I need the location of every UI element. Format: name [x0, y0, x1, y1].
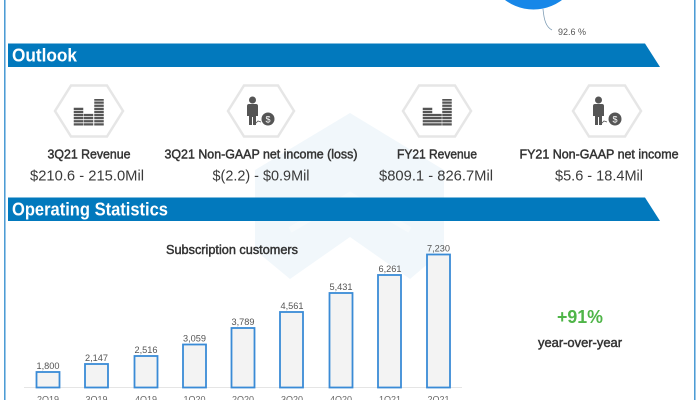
callout: +91% year-over-year: year-over-year	[538, 336, 622, 350]
pie chart fragment: 92.6 %	[558, 27, 587, 38]
bar chart: Subscription customers: 2,516	[134, 345, 158, 355]
panel: 3Q21 Revenue	[30, 86, 144, 184]
panel: FY21 Non-GAAP net income: FY21 Non-GAAP net income	[520, 148, 679, 162]
bar chart: Subscription customers: 1,800	[36, 361, 60, 371]
bar chart: Subscription customers: 4,561	[280, 301, 304, 311]
panel: 3Q21 Non-GAAP net income (loss): 3Q21 Non-GAAP net income (loss)	[164, 148, 358, 162]
heading: Outlook	[8, 44, 660, 67]
panel: FY21 Non-GAAP net income: $5.6 - 18.4Mil	[555, 168, 643, 184]
icon: person with dollar coin	[228, 86, 294, 136]
icon: coins	[403, 86, 471, 136]
chart title: Subscription customers	[166, 243, 298, 257]
panel: FY21 Non-GAAP net income	[520, 86, 679, 184]
panel: 3Q21 Non-GAAP net income (loss)	[164, 86, 358, 184]
icon: person with dollar coin: $	[612, 114, 618, 124]
bar chart: Subscription customers	[24, 243, 462, 400]
watermark logo	[255, 113, 444, 279]
panel: 3Q21 Non-GAAP net income (loss): $(2.2) - $0.9Mil	[212, 168, 310, 184]
pie chart fragment	[486, 0, 587, 38]
panel: FY21 Revenue: $809.1 - 826.7Mil	[379, 168, 493, 184]
bar chart: Subscription customers: 3,059	[183, 334, 206, 344]
heading: Operating Statistics	[8, 198, 660, 221]
bar chart: Subscription customers: 2,147	[85, 353, 108, 363]
bar chart: Subscription customers: 6,261	[378, 264, 402, 274]
callout: +91% year-over-year: +91%	[557, 306, 603, 327]
panel: 3Q21 Revenue: 3Q21 Revenue	[48, 148, 131, 162]
bar chart: Subscription customers: 3,789	[232, 317, 254, 327]
panel: FY21 Revenue	[379, 86, 493, 184]
panel: 3Q21 Revenue: $210.6 - 215.0Mil	[30, 168, 144, 184]
icon: person with dollar coin	[573, 86, 641, 136]
icon: coins	[55, 86, 123, 136]
panel: FY21 Revenue: FY21 Revenue	[397, 148, 477, 162]
bar chart: Subscription customers: 5,431	[330, 282, 352, 292]
bar chart: Subscription customers: 7,230	[427, 244, 450, 254]
heading: Operating Statistics: Operating Statistics	[12, 200, 168, 220]
callout: +91% year-over-year	[538, 306, 622, 350]
heading: Outlook: Outlook	[12, 46, 78, 66]
icon: person with dollar coin: $	[265, 114, 271, 124]
